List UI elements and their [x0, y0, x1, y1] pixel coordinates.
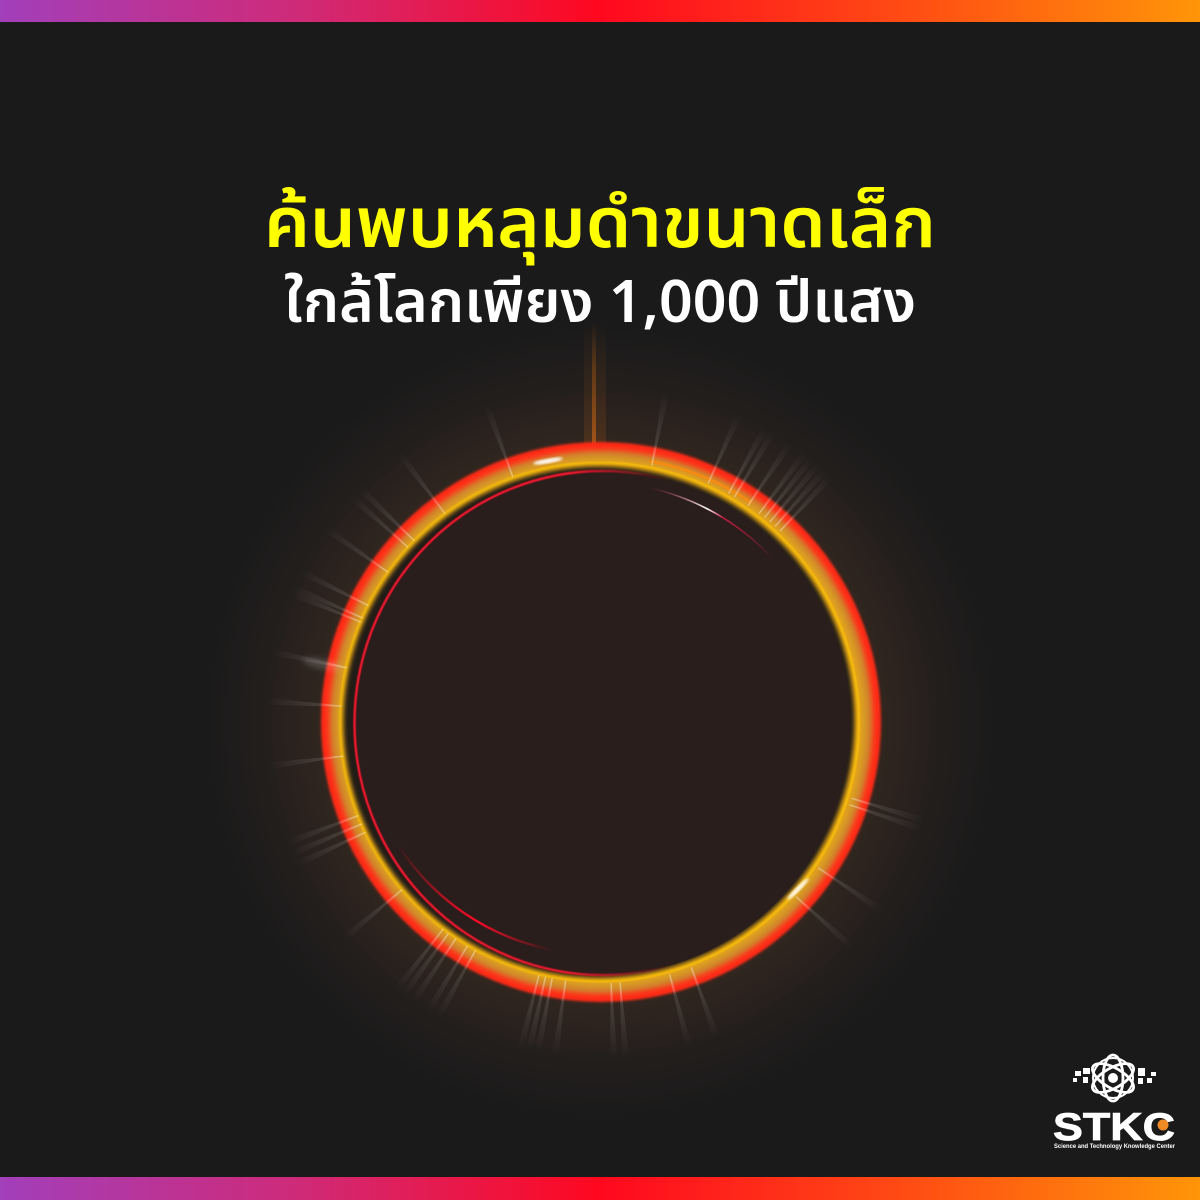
black hole ring illustration: [206, 322, 996, 1118]
white highlight top left: [533, 456, 563, 466]
inner dark disc: [354, 471, 850, 975]
white highlight bottom right: [786, 877, 810, 901]
thin inner red ring: [354, 471, 850, 975]
yellow ring core: [340, 463, 858, 981]
dark gap behind the inner disc: [344, 466, 854, 978]
top gradient bar: [0, 0, 1200, 22]
logo tagline: Science and Technology Knowledge Center: [1054, 1144, 1176, 1150]
inner red arc glint: [397, 843, 553, 950]
bottom gradient bar: [0, 1177, 1200, 1200]
title line 1: ค้นพบหลุมดำขนาดเล็ก: [264, 173, 936, 279]
orange streak in top right of ring: [650, 461, 752, 503]
logo pixel squares: [1073, 1068, 1156, 1084]
outer halo glow: [206, 328, 996, 1118]
title line 2: ใกล้โลกเพียง 1,000 ปีแสง: [284, 259, 916, 349]
icon: atom: [1088, 1055, 1138, 1101]
logo orange dot: [1158, 1120, 1168, 1130]
inner white arc glint: [650, 488, 773, 559]
soft flare patch on left of ring: [301, 655, 343, 673]
gold and red ring band: [321, 442, 881, 1002]
light rays: [265, 391, 925, 1059]
logo wordmark: STKC: [1053, 1106, 1175, 1149]
title: [264, 173, 936, 349]
vertical light beam: [584, 322, 606, 444]
STKC logo: [1053, 1055, 1176, 1150]
